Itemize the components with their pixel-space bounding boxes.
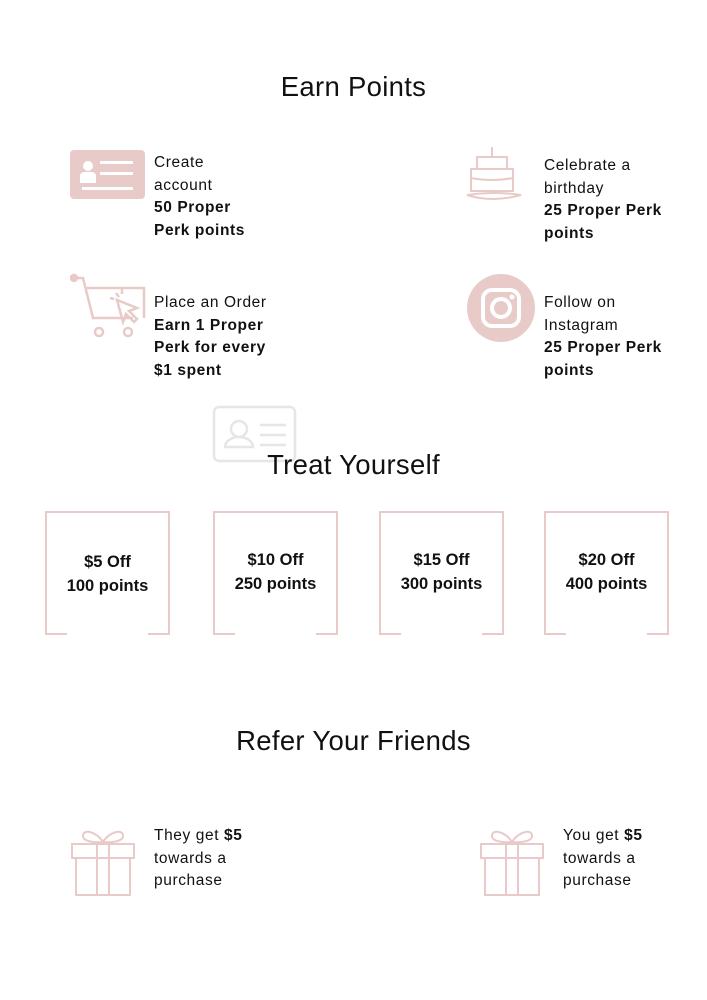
text: create account: 50 Proper [154,199,231,216]
text: they get: towards a [154,850,227,866]
icon: instagram [467,274,535,342]
text: they get: They get $5 [154,827,242,844]
reward box 1: 100 points [67,577,148,595]
reward box 1 [45,511,170,635]
text: place an order [154,294,267,378]
text: create account [154,154,245,238]
text: birthday: Celebrate a [544,157,631,174]
reward box 4 [544,511,669,635]
text: instagram: Follow on [544,294,616,311]
text: you get: purchase [563,872,632,889]
title: Treat Yourself: Treat Yourself [267,449,440,480]
title: Refer Your Friends: Refer Your Friends [236,725,471,756]
title: Earn Points: Earn Points [281,71,426,102]
icon: account card [70,150,145,199]
reward box 2: 250 points [235,575,316,593]
text: place an order: Perk for every [154,339,266,356]
text: create account: Perk points [154,222,245,238]
reward box 3: $15 Off [414,551,469,569]
text: birthday [544,157,662,242]
text: you get: You get $5 [563,827,643,844]
reward box 2 [213,511,338,635]
text: birthday: 25 Proper Perk [544,202,662,219]
icon: faint id card [212,406,296,462]
text: place an order: $1 spent [154,362,222,378]
text: place an order: Earn 1 Proper [154,316,263,334]
reward box 3 [379,511,504,635]
icon: gift 1 [71,830,135,896]
text: you get [563,827,643,889]
text: birthday: points [544,224,594,242]
icon: gift 2 [480,830,544,896]
reward box 1: $5 Off [84,553,131,571]
reward box 3: 300 points [401,575,482,593]
text: they get [154,827,242,889]
text: they get: purchase [154,872,223,889]
reward box 4: 400 points [566,575,647,593]
text: instagram [544,294,662,378]
text: instagram: Instagram [544,316,618,334]
icon: birthday cake [466,147,522,200]
reward box 4: $20 Off [579,551,634,569]
icon: shopping cart [70,274,146,338]
text: you get: towards a [563,850,636,866]
text: birthday: birthday [544,180,604,196]
text: create account: Create [154,154,204,171]
text: instagram: points [544,362,594,378]
text: create account: account [154,176,212,194]
text: place an order: Place an Order [154,294,267,311]
reward box 2: $10 Off [248,551,303,569]
text: instagram: 25 Proper Perk [544,339,662,356]
